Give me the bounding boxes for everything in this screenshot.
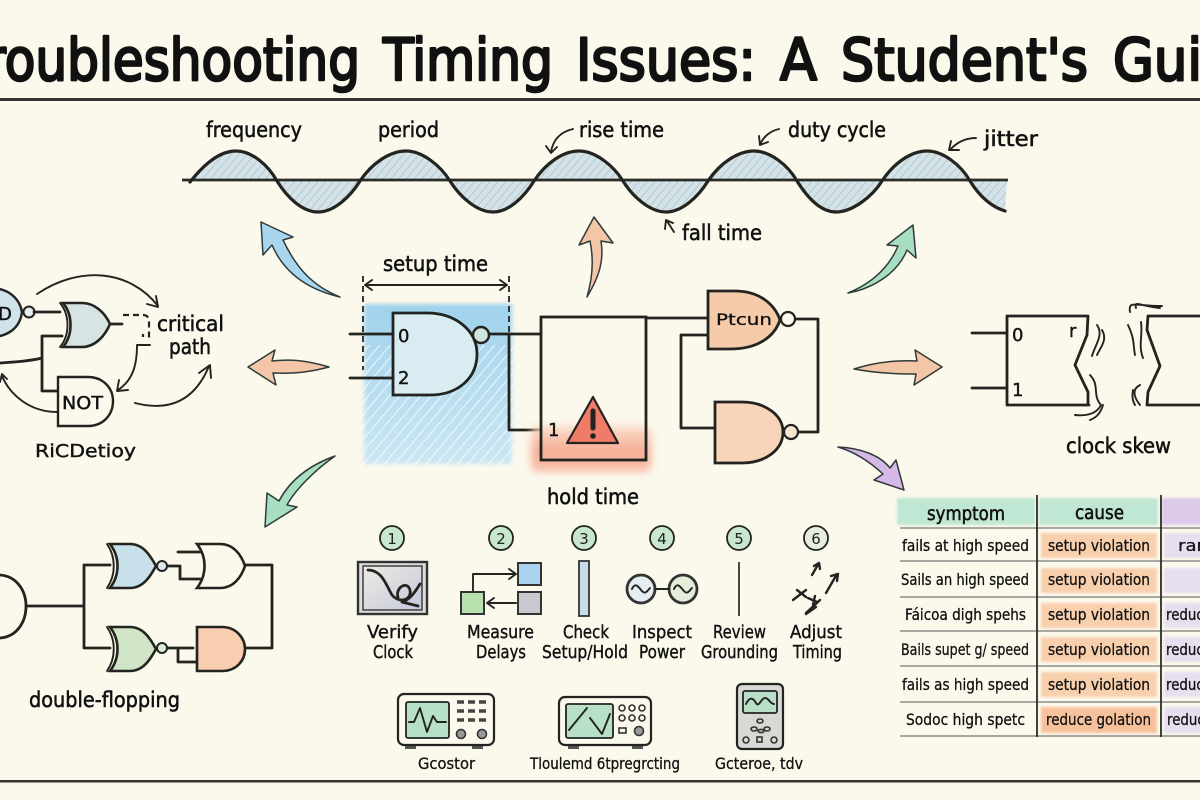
step 5: review grounding: 5: [734, 530, 744, 548]
table text: setup violation: [1048, 640, 1150, 659]
step 3: check setup/hold: 3: [579, 530, 589, 548]
NAND gates: right pair: [646, 291, 818, 463]
step 4: inspect power: Power: [639, 642, 686, 663]
fix cells: [1164, 533, 1200, 733]
arrow: purple down-right: [838, 447, 904, 490]
wave labels: [206, 118, 1038, 245]
table text: fails at high speed: [902, 536, 1029, 555]
table text: setup violation: [1048, 605, 1150, 624]
table text: Sails an high speed: [901, 570, 1029, 589]
tool: multimeter: [715, 684, 803, 773]
tool: oscilloscope 1: Gcostor: [418, 754, 475, 773]
title: A: [780, 26, 817, 94]
tool: oscilloscope 2: Tloulemd 6tpregrcting: [529, 754, 680, 773]
troubleshooting steps: [358, 526, 842, 663]
NAND gate: setup: 0: [398, 326, 409, 347]
table text: symptom: [927, 503, 1005, 525]
step 3: check setup/hold: [542, 526, 628, 663]
wave labels: period: [378, 118, 439, 142]
icon: warning triangle: [567, 397, 618, 443]
clock skew blocks: r: [1069, 321, 1077, 342]
title: [0, 26, 1200, 94]
cause cells: [1041, 533, 1157, 733]
step 4: inspect power: 4: [657, 530, 667, 548]
clock waveform: [182, 151, 1008, 212]
flip-flop box with hold-time warning: [531, 317, 651, 509]
tool: multimeter: Gcteroe, tdv: [715, 754, 803, 773]
NAND gate: setup: 2: [398, 368, 409, 389]
step 6: adjust timing: 6: [811, 530, 821, 548]
table text: cause: [1075, 502, 1124, 524]
wave labels: duty cycle: [788, 118, 886, 142]
table text: setup violation: [1048, 536, 1150, 555]
wave labels: jitter: [983, 127, 1038, 151]
arrow: green up-right: [848, 225, 916, 293]
clock skew blocks: 0: [1012, 325, 1023, 346]
table text: Sodoc high spetc: [906, 710, 1025, 729]
step 1: verify clock: [358, 526, 427, 663]
arrow: green down-left: [265, 456, 335, 527]
table text: Bails supet g/ speed: [901, 640, 1029, 659]
step 2: measure delays: Delays: [476, 642, 526, 663]
critical path circuit: critical: [157, 312, 224, 336]
setup time region: [360, 252, 516, 469]
double-flopping circuit: [0, 544, 272, 712]
step 1: verify clock: Clock: [373, 642, 413, 663]
step 5: review grounding: Review: [713, 622, 766, 643]
table text: reduce golation: [1046, 710, 1151, 729]
table text: fails as high speed: [902, 675, 1029, 694]
table text: [901, 502, 1200, 729]
title: Student's: [841, 26, 1088, 94]
arrow: peach left: [248, 350, 329, 385]
step 1: verify clock: Verify: [367, 622, 418, 643]
table text: Fáicoa digh spehs: [905, 605, 1026, 624]
step 6: adjust timing: Adjust: [790, 622, 842, 643]
clock skew blocks: clock skew: [1066, 434, 1171, 458]
step 4: inspect power: [627, 526, 697, 663]
step 6: adjust timing: Timing: [792, 642, 842, 663]
NAND gate: setup: [350, 313, 541, 430]
critical path circuit: [0, 275, 224, 462]
title: Timing: [382, 26, 553, 94]
step 5: review grounding: Grounding: [701, 642, 778, 663]
double-flopping circuit: double-flopping: [29, 688, 180, 712]
critical path circuit: RiCDetioy: [35, 441, 136, 462]
step 4: inspect power: Inspect: [632, 622, 692, 643]
arrow: peach right: [854, 350, 942, 385]
step 2: measure delays: [461, 526, 541, 663]
step 1: verify clock: 1: [387, 530, 397, 548]
step 5: review grounding: [701, 526, 778, 663]
wave labels: fall time: [682, 221, 762, 245]
table text: setup violation: [1048, 570, 1150, 589]
clock skew blocks: [972, 304, 1200, 458]
wave labels: frequency: [206, 118, 302, 142]
clock skew blocks: 1: [1012, 380, 1023, 401]
title: Issues:: [576, 26, 756, 94]
arrow: peach up: [579, 217, 613, 297]
flip-flop box with hold-time warning: 1: [548, 420, 559, 441]
critical path circuit: path: [169, 335, 211, 359]
step 2: measure delays: Measure: [467, 622, 534, 643]
wave labels: rise time: [579, 118, 664, 142]
critical path circuit: NOT: [62, 393, 104, 414]
step 2: measure delays: 2: [496, 530, 506, 548]
tool: oscilloscope 2: [529, 697, 680, 773]
step 6: adjust timing: [790, 526, 842, 663]
arrow: blue up-left: [261, 222, 340, 297]
table header: [897, 498, 1200, 525]
tool: oscilloscope 1: [398, 694, 494, 773]
table text: setup violation: [1048, 675, 1150, 694]
symptom-cause table: [897, 495, 1200, 737]
flip-flop box with hold-time warning: hold time: [547, 485, 639, 509]
NAND gates: right pair: Ptcun: [716, 310, 772, 329]
setup time region: setup time: [383, 252, 488, 276]
step 3: check setup/hold: Setup/Hold: [542, 642, 628, 663]
step 3: check setup/hold: Check: [563, 622, 609, 643]
